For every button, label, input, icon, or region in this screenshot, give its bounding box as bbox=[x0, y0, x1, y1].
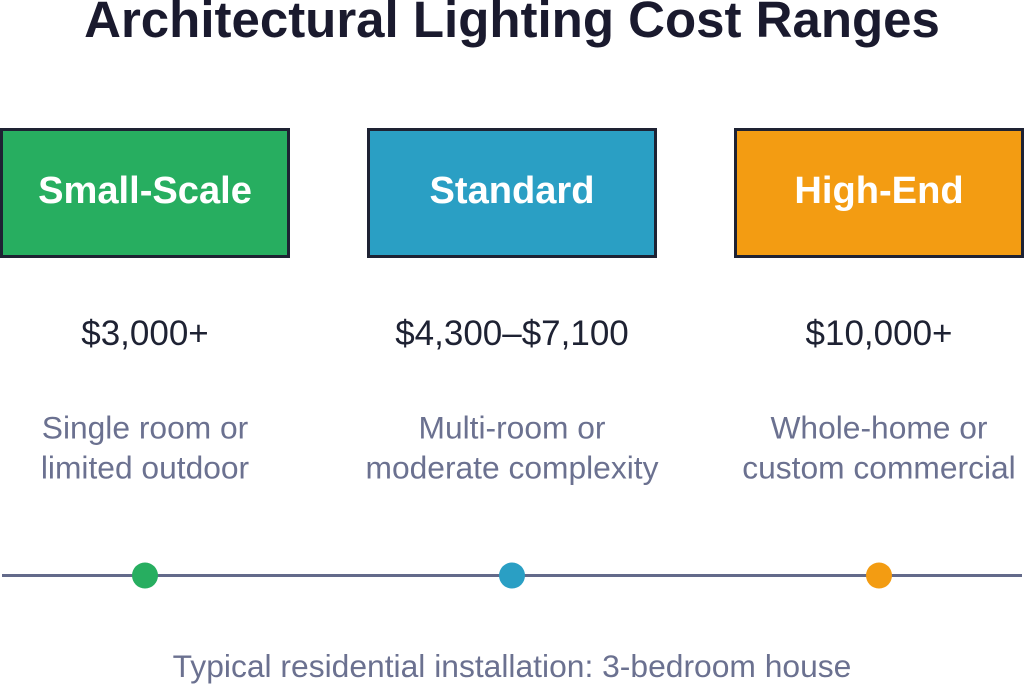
description: High-End: Whole-home or bbox=[770, 410, 988, 446]
description: Standard: moderate complexity bbox=[366, 450, 659, 486]
card: High-End bbox=[736, 130, 1022, 256]
description: High-End: custom commercial bbox=[742, 450, 1016, 486]
marker: Standard bbox=[499, 562, 525, 588]
card: Small-Scale bbox=[2, 130, 288, 256]
marker: High-End bbox=[866, 562, 892, 588]
card: Standard bbox=[368, 130, 656, 256]
price: High-End: $10,000+ bbox=[806, 314, 952, 353]
timeline with markers bbox=[2, 562, 1022, 588]
card: Small-Scale: Small-Scale bbox=[38, 170, 252, 212]
description: Small-Scale: Single room or bbox=[42, 410, 249, 446]
description: Standard: Multi-room or bbox=[418, 410, 606, 446]
card: High-End: High-End bbox=[794, 170, 964, 212]
panel: standard tier bbox=[366, 130, 659, 486]
panel: high-end tier bbox=[736, 130, 1022, 486]
footnote: Typical residential installation: 3-bedroom house bbox=[173, 648, 851, 684]
price: Standard: $4,300–$7,100 bbox=[395, 314, 629, 353]
price: Small-Scale: $3,000+ bbox=[81, 314, 209, 353]
description: Small-Scale: limited outdoor bbox=[41, 450, 250, 486]
marker: Small-Scale bbox=[132, 562, 158, 588]
card: Standard: Standard bbox=[429, 170, 595, 212]
panel: small-scale tier bbox=[2, 130, 288, 486]
